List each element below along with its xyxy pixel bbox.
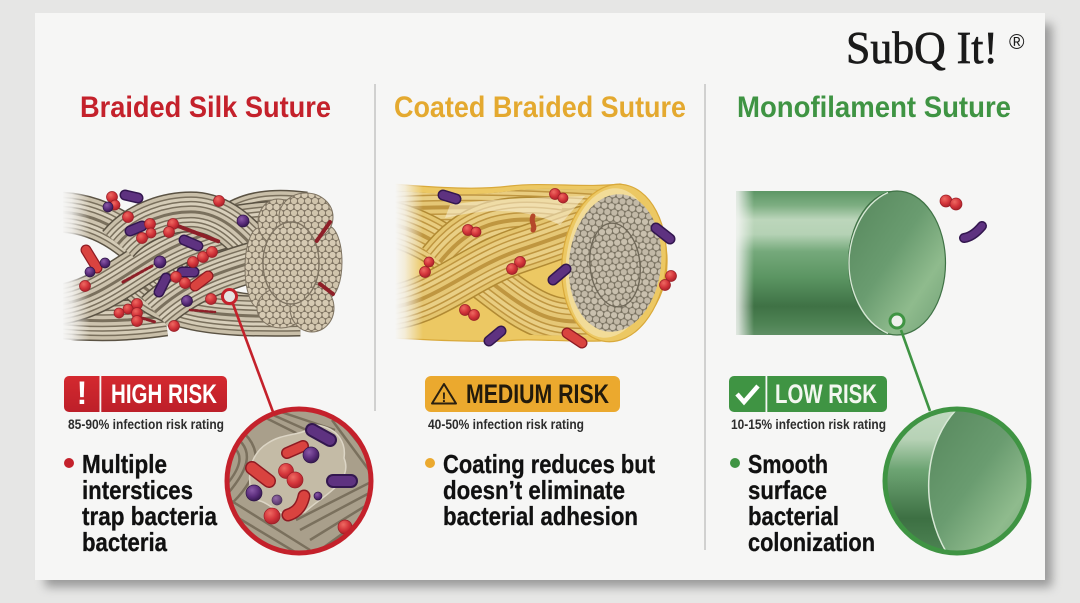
divider left: [374, 84, 376, 411]
heading: braided silk suture: Braided Silk Suture: [80, 91, 331, 124]
callout marker: [890, 314, 904, 328]
bullet dot: [730, 458, 740, 468]
risk rating: 85-90%: 85-90% infection risk rating: [68, 417, 224, 432]
bacteria near monofilament: [940, 195, 982, 238]
bullet text: silk: interstices: [82, 475, 193, 505]
divider right: [704, 84, 706, 550]
logo: SubQ It!: SubQ It!: [846, 22, 998, 73]
logo: SubQ It!: ®: [1009, 31, 1025, 54]
risk rating: 40-50%: 40-50% infection risk rating: [428, 417, 584, 432]
bullet dot: [64, 458, 74, 468]
panel: braided silk suture: [64, 96, 374, 556]
badge: high risk: !: [77, 375, 87, 411]
illustration: coated braid: [378, 178, 676, 347]
bullet dot: [425, 458, 435, 468]
cross-section of filaments: [245, 193, 342, 332]
bullet text: coated: bacterial adhesion: [443, 501, 638, 531]
magnified view: smooth surface: [880, 404, 1040, 558]
callout marker: [222, 290, 236, 304]
callout line: silk magnifier: [233, 304, 273, 412]
heading: coated braided suture: Coated Braided Suture: [394, 91, 686, 124]
dark red bacteria streaks: [123, 222, 333, 322]
callout line: monofilament magnifier: [901, 330, 930, 411]
panel: coated braided suture: [378, 91, 686, 531]
badge: low risk: [729, 376, 887, 412]
bullet text: silk: Multiple: [82, 449, 167, 479]
badge: high risk: HIGH RISK: [111, 379, 217, 409]
risk rating: 10-15%: 10-15% infection risk rating: [731, 417, 886, 432]
illustration: smooth green cylinder: [730, 188, 946, 338]
illustration: braided silk strand: [40, 185, 342, 340]
badge: high risk: [64, 375, 227, 412]
badge: low risk: LOW RISK: [775, 379, 877, 409]
bullet text: monofilament: surface: [748, 475, 827, 505]
bullet text: monofilament: colonization: [748, 527, 875, 557]
bacteria on coating: [420, 188, 676, 343]
bullet text: monofilament: Smooth: [748, 449, 828, 479]
bullet text: coated: Coating reduces but: [443, 449, 655, 479]
bullet text: coated: [443, 449, 655, 531]
bacteria cluster: [80, 192, 249, 332]
bullet text: silk: [82, 449, 217, 557]
bullet text: silk: trap bacteria: [82, 501, 217, 531]
bullet text: coated: doesn’t eliminate: [443, 475, 625, 505]
bullet text: monofilament: bacterial: [748, 501, 839, 531]
bullet text: silk: bacteria: [82, 527, 167, 557]
magnified view: trapped bacteria: [222, 407, 380, 558]
heading: monofilament suture: Monofilament Suture: [737, 91, 1011, 124]
badge: medium risk: !: [442, 389, 446, 405]
panel: monofilament suture: [729, 91, 1040, 558]
badge: medium risk: MEDIUM RISK: [466, 379, 609, 409]
badge: medium risk: [425, 376, 620, 412]
bullet text: monofilament: [748, 449, 875, 557]
coating rim and cross-section: [554, 179, 674, 347]
